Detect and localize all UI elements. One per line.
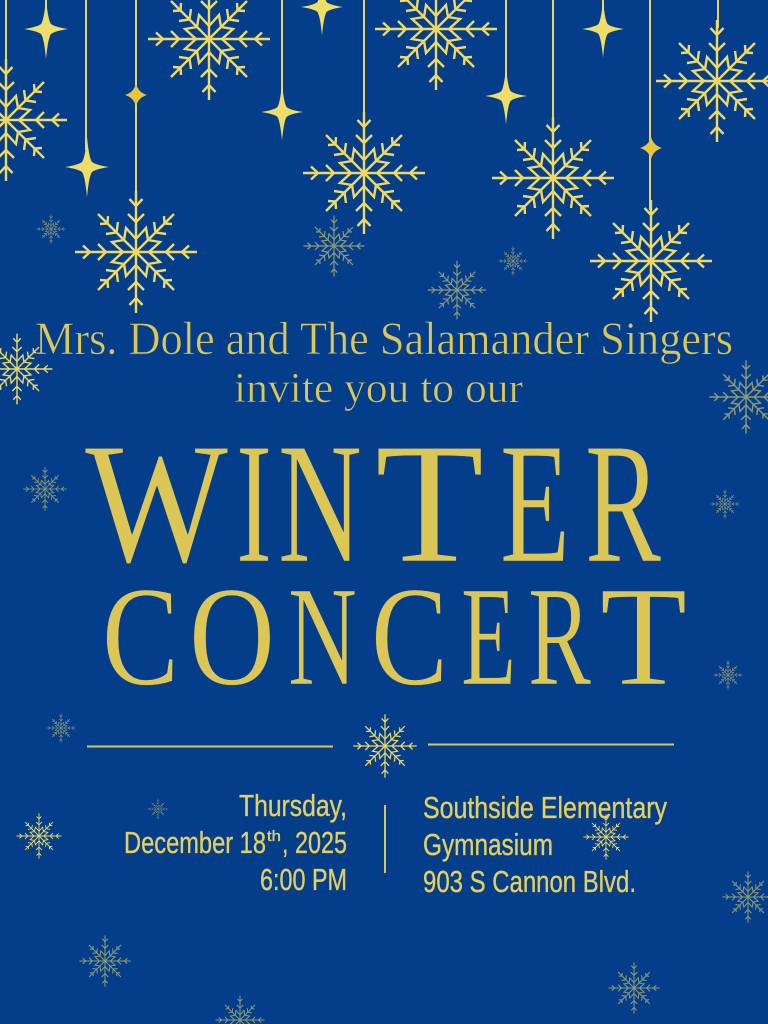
icon: bright small snowflakes — [0, 334, 629, 860]
date and time: 6:00 PM — [260, 862, 347, 897]
icon: large hanging snowflakes — [0, 0, 768, 322]
title: CONCERT: R — [528, 557, 591, 715]
title: CONCERT: O — [189, 557, 275, 715]
icon: hanging gold stars — [24, 0, 662, 197]
title: WINTER: T — [375, 409, 484, 599]
venue and address: 903 S Cannon Blvd. — [423, 864, 636, 899]
date and time: , 2025 — [282, 825, 347, 860]
title: WINTER: N — [278, 409, 362, 599]
title: CONCERT: E — [461, 557, 516, 715]
venue and address — [423, 790, 667, 899]
icon: faint background snowflakes — [23, 214, 768, 1024]
invitation line two: invite you to our — [234, 366, 523, 412]
title: WINTER: W — [85, 409, 228, 599]
title: CONCERT — [102, 557, 687, 715]
date and time: December 18 — [124, 825, 266, 860]
date and time — [124, 788, 347, 897]
title: WINTER — [85, 409, 661, 599]
title: CONCERT: N — [288, 557, 357, 715]
title: CONCERT: C — [371, 557, 448, 715]
divider rules — [87, 744, 674, 873]
hanging strings — [6, 0, 718, 210]
title: CONCERT: T — [600, 557, 687, 715]
title: WINTER: I — [236, 409, 272, 599]
title: CONCERT: C — [102, 557, 179, 715]
date and time: th — [267, 828, 281, 845]
date and time: Thursday, — [239, 788, 347, 823]
invitation line one: Mrs. Dole and The Salamander Singers — [35, 313, 733, 365]
venue and address: Southside Elementary — [423, 790, 667, 825]
title: WINTER: E — [500, 409, 570, 599]
venue and address: Gymnasium — [423, 827, 553, 862]
title: WINTER: R — [585, 409, 661, 599]
